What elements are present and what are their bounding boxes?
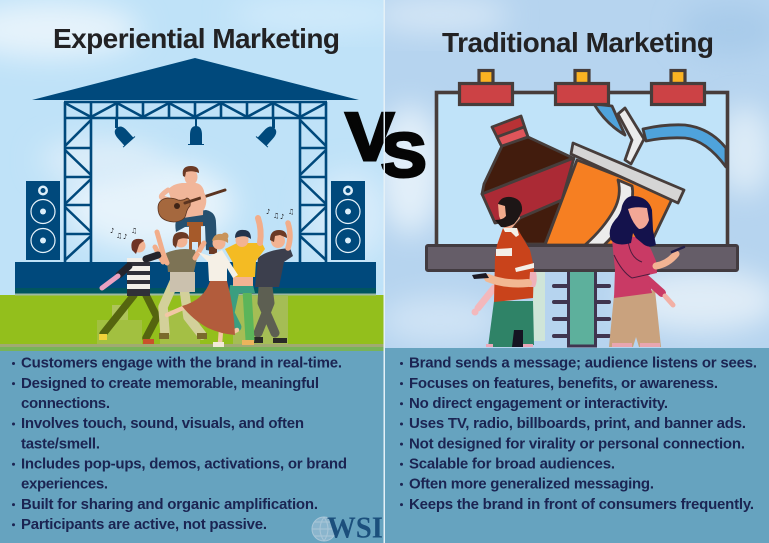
- left speaker: [26, 181, 60, 260]
- center divider: [384, 0, 385, 543]
- head: [184, 169, 198, 185]
- panel: traditional sky background: [370, 0, 769, 349]
- music notes: ♫: [131, 227, 137, 235]
- bullet list: Includes pop-ups, demos, activations, or brand: [21, 456, 347, 472]
- forearm and phone: [656, 254, 676, 266]
- right speaker: [331, 181, 365, 260]
- bullet list: [12, 355, 347, 533]
- bullet list: Participants are active, not passive.: [21, 516, 267, 533]
- music notes: ♪: [280, 213, 284, 221]
- music notes: ♫: [116, 232, 122, 240]
- bullet list: Not designed for virality or personal connection.: [409, 435, 745, 452]
- dancer 1: striped shirt: [99, 239, 163, 344]
- shirt: [494, 228, 534, 302]
- music notes: ♪: [110, 227, 114, 235]
- bottle: [482, 116, 574, 244]
- music notes: ♫: [273, 212, 279, 220]
- grass: [0, 294, 384, 351]
- panel: traditional list: [385, 348, 769, 543]
- guitar: [158, 198, 190, 222]
- shorts: [488, 301, 534, 347]
- panel: experiential sky background: [0, 0, 384, 295]
- torso: [168, 183, 204, 218]
- vs badge: V: [346, 98, 394, 174]
- bullet list: taste/smell.: [21, 435, 100, 452]
- bullet list: Built for sharing and organic amplification.: [21, 496, 318, 513]
- bullet list: Uses TV, radio, billboards, print, and banner ads.: [409, 415, 746, 432]
- stage roof: [32, 58, 359, 100]
- arm: [161, 190, 177, 203]
- hair: [610, 196, 656, 247]
- bullet list: Customers engage with the brand in real-time.: [21, 355, 342, 372]
- bullet list: Keeps the brand in front of consumers frequently.: [409, 496, 754, 513]
- stage platform: [15, 262, 376, 296]
- bullet list: Brand sends a message; audience listens or sees.: [409, 355, 757, 372]
- billboard screen: [436, 92, 728, 248]
- arm back: [478, 288, 494, 308]
- logo: WSI: [312, 510, 383, 543]
- bullet list: connections.: [21, 395, 110, 412]
- bullet list: Designed to create memorable, meaningful: [21, 375, 319, 392]
- music notes: ♪: [123, 233, 127, 241]
- billboard ledge: [426, 246, 738, 270]
- stage truss and towers: [64, 102, 327, 262]
- dancer 4: yellow shirt: [225, 218, 265, 345]
- music notes: ♫: [288, 208, 294, 216]
- music notes: ♪: [266, 208, 270, 216]
- stage lights: [111, 118, 280, 148]
- arm back: [642, 275, 662, 293]
- jeans: [175, 210, 216, 251]
- vs badge: [346, 98, 426, 190]
- bullet list: Scalable for broad audiences.: [409, 456, 615, 472]
- illustration: man with phone: [472, 197, 537, 347]
- vs badge: S: [381, 120, 426, 190]
- dancer 2: olive top: [157, 232, 207, 339]
- illustration: concert stage: [15, 58, 376, 296]
- illustration: dancing crowd: [99, 208, 294, 347]
- logo globe: [312, 517, 336, 541]
- right arm: [201, 192, 204, 208]
- illustration: guitarist on stool: [158, 166, 225, 254]
- cup: [545, 108, 684, 245]
- bullet list: Involves touch, sound, visuals, and often: [21, 415, 304, 432]
- panel: experiential list: [0, 351, 384, 543]
- music notes: [110, 208, 294, 241]
- bullet list: experiences.: [21, 476, 108, 493]
- head and beard: [498, 204, 520, 228]
- illustration: woman with phone: [609, 196, 684, 347]
- illustration: billboard: [426, 70, 738, 346]
- title: Traditional Marketing: Traditional Marketing: [442, 27, 714, 58]
- bullet list: No direct engagement or interactivity.: [409, 395, 668, 412]
- face: [628, 207, 649, 229]
- billboard lamps: [460, 70, 704, 104]
- pants: [609, 290, 661, 347]
- dancer 3: white top and skirt: [167, 232, 238, 347]
- stool: [187, 222, 203, 250]
- top: [612, 237, 657, 298]
- forearm and phone: [529, 272, 537, 287]
- billboard pole and rungs: [533, 270, 609, 346]
- blue road on screen: [594, 104, 726, 167]
- bullet list: [400, 355, 757, 513]
- bullet list: Often more generalized messaging.: [409, 476, 654, 493]
- title: Experiential Marketing: Experiential Marketing: [53, 23, 340, 54]
- bullet list: Focuses on features, benefits, or awareness.: [409, 375, 718, 392]
- dancer 5: dark shirt: [253, 223, 293, 343]
